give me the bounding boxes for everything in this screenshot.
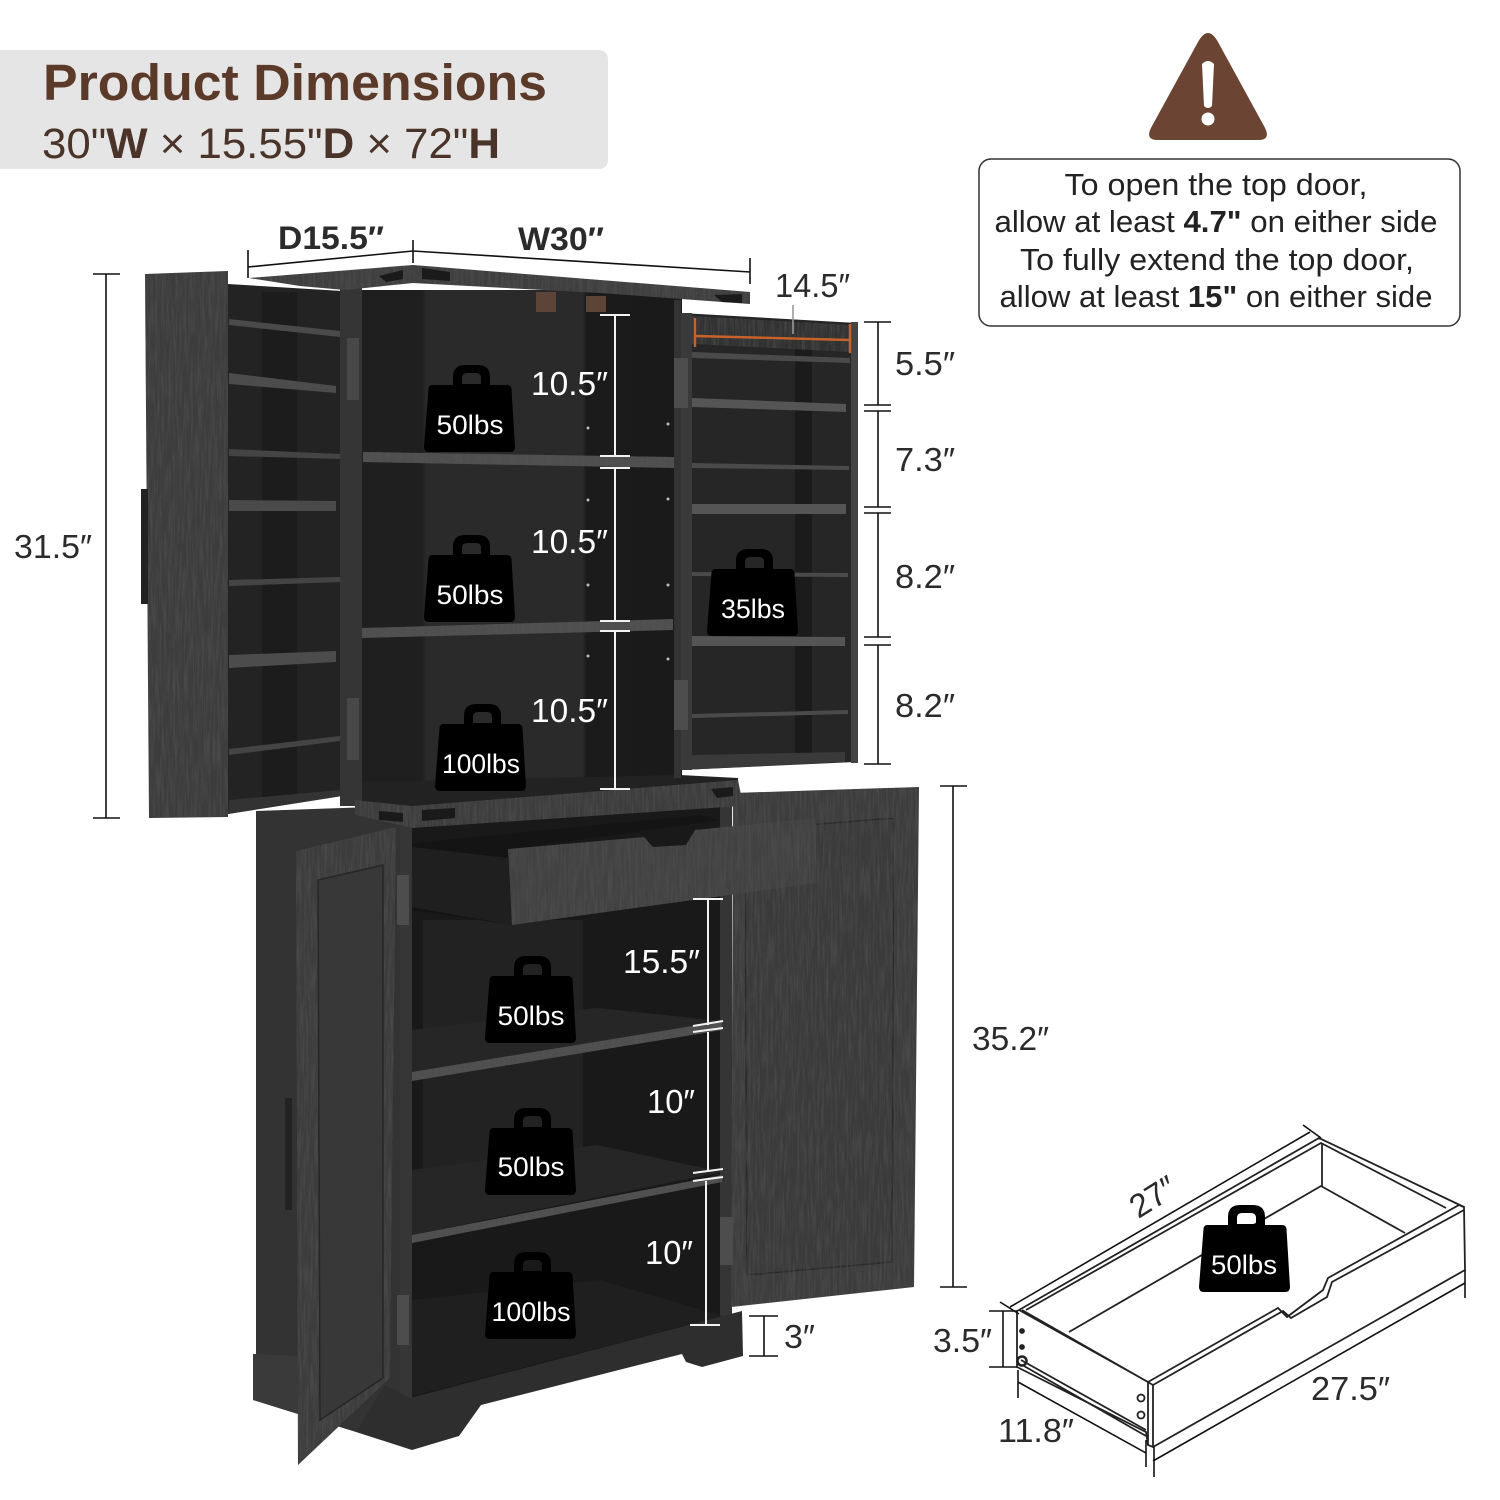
callout: door clearance note: allow at least 15" on either side bbox=[1000, 279, 1433, 314]
icon: weight 100lbs cabinet floor bbox=[485, 1252, 576, 1339]
icon: weight 50lbs drawer bbox=[1199, 1205, 1290, 1292]
label: 15.5: 15.5″ bbox=[623, 943, 700, 980]
upper cabinet interior bbox=[340, 286, 738, 815]
dimension: lower cabinet height 35.2: 35.2″ bbox=[972, 1020, 1049, 1057]
header panel: product dimensions bbox=[0, 50, 608, 169]
dimension: right door shelf spacing: 7.3″ bbox=[895, 441, 955, 478]
label: 10.5 bottom: 10.5″ bbox=[531, 692, 608, 729]
icon: weight 100lbs bottom shelf bbox=[435, 704, 526, 791]
dimension: drawer height 3.5 bbox=[933, 1311, 1017, 1367]
upper cabinet top panel bbox=[249, 265, 750, 304]
label: 10.5 middle: 10.5″ bbox=[531, 523, 608, 560]
label: 10.5 top: 10.5″ bbox=[531, 365, 608, 402]
dimension: drawer 27 bbox=[1000, 1125, 1321, 1314]
icon: weight 50lbs middle shelf: 50lbs bbox=[436, 580, 504, 610]
label: 10 lower: 10″ bbox=[645, 1234, 693, 1271]
upper cabinet bbox=[141, 265, 858, 818]
dimension: base height 3: 3″ bbox=[784, 1318, 815, 1355]
dimension: right door shelf spacing: 8.2″ bbox=[895, 687, 955, 724]
dimension: lower cabinet height 35.2 bbox=[940, 786, 1049, 1287]
icon: weight 50lbs lower shelf one: 50lbs bbox=[498, 1001, 564, 1031]
icon: weight 50lbs lower shelf two: 50lbs bbox=[498, 1152, 564, 1182]
right door bbox=[720, 787, 919, 1307]
dimension: depth and width top: W30″ bbox=[518, 221, 604, 257]
icon: warning triangle bbox=[1149, 33, 1267, 140]
dimension: drawer depth 11.8: 11.8″ bbox=[998, 1412, 1074, 1449]
open drawer bbox=[412, 815, 816, 925]
dimension: depth and width top: D15.5″ bbox=[278, 220, 384, 256]
icon: weight 100lbs bottom shelf: 100lbs bbox=[442, 749, 520, 779]
dimension: right door shelf spacing bbox=[864, 322, 955, 764]
upper cabinet left door bbox=[141, 271, 342, 818]
callout: door clearance note bbox=[979, 159, 1460, 326]
dimension: drawer height 3.5: 3.5″ bbox=[933, 1322, 992, 1359]
icon: weight 50lbs lower shelf two bbox=[485, 1108, 576, 1195]
dimension: lower interior height lines bbox=[690, 899, 723, 1325]
title: Product Dimensions bbox=[43, 54, 547, 111]
dimension: left door height 31.5 bbox=[14, 274, 120, 818]
callout: door clearance note: To open the top door, bbox=[1064, 167, 1368, 202]
callout: door clearance note: To fully extend the top door, bbox=[1020, 242, 1414, 277]
icon: weight 35lbs door shelf bbox=[707, 549, 798, 636]
drawer line drawing bbox=[1017, 1138, 1465, 1447]
dimension: drawer width 27.5 bbox=[1153, 1270, 1465, 1477]
dimension: door shelf width 14.5 bbox=[695, 267, 850, 353]
dimension: door shelf width 14.5: 14.5″ bbox=[775, 267, 850, 304]
dimension: depth and width top bbox=[248, 220, 750, 284]
dimension: drawer width 27.5: 27.5″ bbox=[1311, 1370, 1390, 1407]
icon: weight 50lbs lower shelf one bbox=[485, 956, 576, 1043]
dimension: drawer depth 11.8 bbox=[998, 1370, 1146, 1467]
lower cabinet bbox=[253, 780, 919, 1465]
callout: door clearance note: allow at least 4.7" on either side bbox=[994, 204, 1438, 239]
label: 10 upper: 10″ bbox=[647, 1083, 695, 1120]
icon: weight 50lbs top shelf bbox=[424, 365, 515, 452]
dimension: upper interior height lines bbox=[600, 315, 630, 789]
lower cabinet base bbox=[356, 1311, 743, 1450]
dimension: base height 3 bbox=[749, 1316, 815, 1356]
lower cabinet interior bbox=[400, 790, 732, 1400]
dimension: right door shelf spacing: 5.5″ bbox=[895, 345, 955, 382]
subtitle: overall size: 30"W × 15.55"D × 72"H bbox=[42, 120, 500, 168]
drawer diagram bbox=[933, 1125, 1465, 1477]
left door bbox=[296, 827, 409, 1465]
dimension: drawer 27: 27″ bbox=[1122, 1168, 1183, 1225]
icon: weight 100lbs cabinet floor: 100lbs bbox=[492, 1297, 570, 1327]
icon: weight 50lbs top shelf: 50lbs bbox=[436, 410, 504, 440]
lower cabinet top plate bbox=[355, 780, 741, 828]
icon: weight 50lbs middle shelf bbox=[424, 535, 515, 622]
lower cabinet left side bbox=[253, 806, 401, 1432]
icon: weight 50lbs drawer: 50lbs bbox=[1211, 1250, 1277, 1280]
upper cabinet right door bbox=[674, 313, 858, 770]
dimension: left door height 31.5: 31.5″ bbox=[14, 528, 92, 565]
dimension: right door shelf spacing: 8.2″ bbox=[895, 558, 955, 595]
icon: weight 35lbs door shelf: 35lbs bbox=[721, 594, 785, 624]
